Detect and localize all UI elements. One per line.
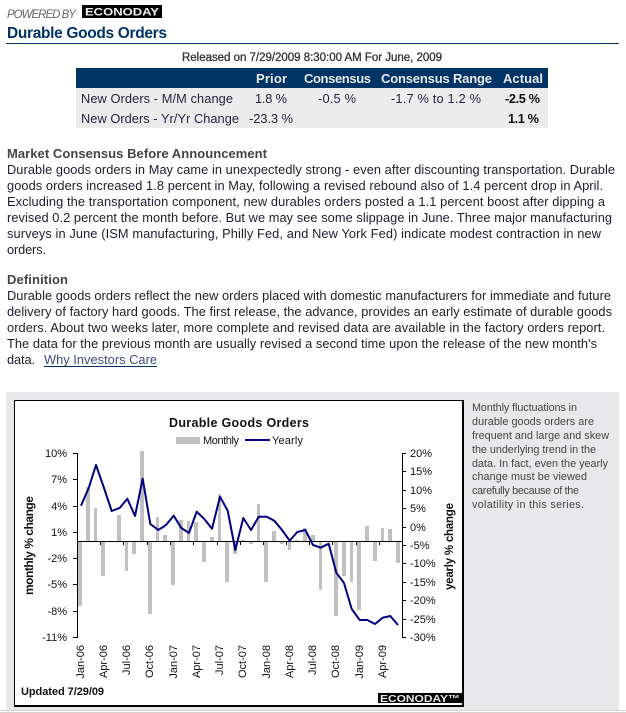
left axis labels: 4% [51,501,67,513]
text block: market consensus: surveys in June (ISM manufacturing, Philly Fed, and New York Fed) indicate modest contraction in new [7,226,602,241]
x axis labels: Jul-08 [307,645,319,675]
panel: chart frame [14,400,464,707]
x axis labels: Jan-07 [168,645,180,679]
chart title: Durable Goods Orders [169,416,309,430]
x axis labels: Jul-06 [121,645,133,675]
x axis labels: Apr-09 [377,645,389,678]
left axis labels: -11% [42,632,67,644]
data table: Actual [503,71,543,86]
text block: definition: Durable goods orders reflect the new orders placed with domestic manufacturers for immediate and future [7,288,611,303]
line chart: yearly change [81,465,398,625]
text block: definition: delivery of factory hard goods. The first release, the advance, provides an early estimate of durable goods [7,304,612,319]
legend: Yearly [272,435,304,447]
x axis labels: Jan-09 [354,645,366,679]
data table: New Orders - M/M change [81,91,233,106]
x axis labels: Apr-08 [284,645,296,678]
data table [76,68,548,128]
x axis labels: Oct-06 [144,645,156,678]
text block: market consensus: orders. [7,242,46,257]
text block: market consensus: Durable goods orders in May came in unexpectedly strong - even after discounting transportation. Durable [7,162,615,177]
bar chart: monthly change [78,451,400,616]
left axis title: monthly % change [22,496,36,595]
left axis labels: 7% [51,474,67,486]
powered by branding: ECONODAY [85,6,160,18]
right axis labels: 5% [410,503,426,515]
right axis labels: 10% [410,485,432,497]
x axis labels: Apr-07 [191,645,203,678]
right axis labels [410,448,436,644]
title: Durable Goods Orders [7,25,167,42]
side note: data. In fact, even the yearly [472,458,609,470]
right axis labels: -5% [410,540,430,552]
data table: 1.1 % [508,111,540,126]
right axis labels: -15% [410,577,436,589]
panel: chart background [6,392,619,710]
powered by branding [7,5,162,21]
side note: frequent and large and skew [472,430,609,442]
powered by branding: POWERED BY [7,9,77,21]
data table: New Orders - Yr/Yr Change [81,111,239,126]
right axis labels: -20% [410,595,436,607]
legend [176,435,304,447]
data table: 1.8 % [255,91,287,106]
right axis labels: 20% [410,448,432,460]
x axis labels: Jul-07 [214,645,226,675]
data table: -2.5 % [505,91,541,106]
text block: definition: Why Investors Care [44,352,157,367]
left axis labels: -5% [47,579,67,591]
text block: definition: The data for the previous month are usually revised a second time upon the release of the new month's [7,336,597,351]
heading: definition: Definition [7,272,68,287]
right axis labels: -30% [410,632,436,644]
side note: carefully because of the [472,485,579,497]
right axis labels: 15% [410,466,432,478]
right axis title: yearly % change [444,503,456,590]
axes [73,453,406,638]
x axis labels: Apr-06 [98,645,110,678]
left axis labels: 10% [45,448,67,460]
left axis labels: -2% [47,553,67,565]
text block: market consensus [7,162,615,257]
side note: the underlying trend in the [472,444,596,456]
side note: durable goods orders are [472,416,594,428]
legend: Monthly [203,435,240,447]
x axis labels [75,645,389,679]
x axis labels: Oct-07 [237,645,249,678]
text block: market consensus: Excluding the transportation component, new durables orders posted a 1.1 percent boost after dipping a [7,194,606,209]
right axis labels: -10% [410,558,436,570]
side note: volatility in this series. [472,499,584,511]
x axis labels: Jan-08 [261,645,273,679]
x axis labels: Jan-06 [75,645,87,679]
text block: market consensus: revised 0.2 percent the month before. But we may see some slippage in June. Three major manufacturing [7,210,612,225]
left axis labels [42,448,67,644]
x axis labels: Oct-08 [330,645,342,678]
text block: definition: data. [7,352,35,367]
text block: definition: orders. About two weeks later, more complete and revised data are available in the factory orders report. [7,320,605,335]
right axis labels: 0% [410,522,426,534]
text block: market consensus: goods orders increased 1.8 percent in May, following a revised rebound also of 1.4 percent drop in April. [7,178,603,193]
release date: Released on 7/29/2009 8:30:00 AM For June, 2009 [182,52,442,64]
data table: -1.7 % to 1.2 % [391,91,481,106]
text block: definition [7,288,612,367]
updated note: Updated 7/29/09 [21,686,104,698]
chart logo: ECONODAY™ [380,694,460,705]
side note [472,402,609,511]
right axis labels: -25% [410,614,436,626]
data table: Prior [256,71,287,86]
left axis labels: 1% [51,527,67,539]
left axis labels: -8% [47,606,67,618]
data table: -0.5 % [318,91,356,106]
data table: Consensus Range [381,71,492,86]
data table: -23.3 % [249,111,293,126]
heading: market consensus: Market Consensus Before Announcement [7,146,268,161]
data table: Consensus [304,71,371,86]
side note: Monthly fluctuations in [472,402,577,414]
side note: change must be viewed [472,471,587,483]
